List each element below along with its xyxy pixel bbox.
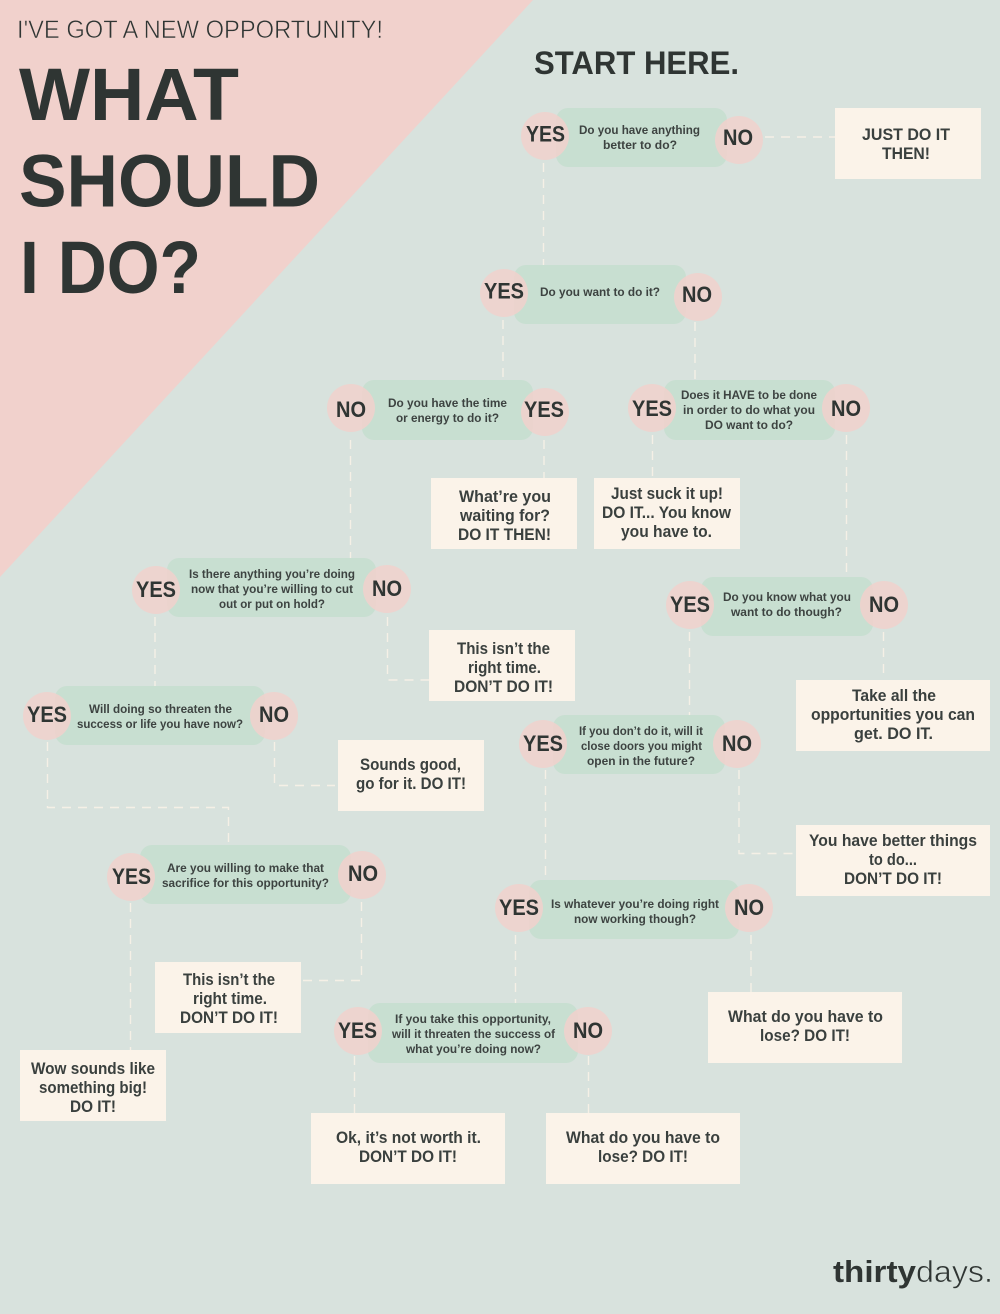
decision: close doors: If you don’t do it, will it [579, 724, 703, 738]
outcome: take all the opportunities [796, 680, 990, 751]
decision: anything better to do: NO [723, 125, 753, 150]
outcome: just suck it up: Just suck it up! [611, 485, 723, 503]
outcome: what do you have to lose first: What do you have to [728, 1008, 883, 1026]
logo: thirtydays [833, 1254, 993, 1289]
outcome: better things to do [796, 825, 990, 896]
decision: close doors: open in the future? [587, 754, 695, 768]
decision: know what you want: want to do though? [730, 605, 842, 619]
decision: want to do it: Do you want to do it? [540, 285, 660, 299]
decision: does it have to be done: Does it HAVE to be done [681, 388, 817, 402]
decision: threaten what you're doing: If you take this opportunity, [395, 1012, 551, 1026]
decision: threaten what you're doing [334, 1003, 612, 1063]
decision: willing to make sacrifice [107, 845, 386, 904]
outcome: what do you have to lose second: lose? DO IT! [598, 1148, 688, 1166]
decision: threaten success: YES [27, 702, 67, 727]
decision: anything to cut [132, 558, 411, 617]
outcome: take all the opportunities: opportunities you can [811, 706, 975, 724]
outcome: what're you waiting for: What’re you [459, 488, 551, 506]
decision: anything to cut: Is there anything you’re doing [189, 567, 355, 581]
outcome: sounds good [338, 740, 484, 811]
decision: threaten success: Will doing so threaten the [89, 702, 232, 716]
outcome: sounds good: Sounds good, [360, 756, 461, 774]
decision: know what you want [666, 577, 908, 636]
outcome: just do it then [835, 108, 981, 179]
outcome: take all the opportunities: get. DO IT. [854, 725, 933, 743]
dashed connectors [48, 137, 884, 1113]
decision: is it working: NO [734, 895, 764, 920]
decision: threaten what you're doing: NO [573, 1018, 603, 1043]
decision: willing to make sacrifice: sacrifice for this opportunity? [162, 876, 329, 890]
decision: threaten what you're doing: will it threaten the success of [391, 1027, 556, 1041]
outcome: not the right time second: right time. [193, 990, 267, 1008]
decision: want to do it: NO [682, 282, 712, 307]
logo: thirtydays: days. [916, 1254, 993, 1289]
decision: does it have to be done: in order to do what you [683, 403, 815, 417]
decision: does it have to be done: DO want to do? [705, 418, 793, 432]
outcome: just suck it up: DO IT... You know [602, 504, 731, 522]
decision: anything to cut: now that you’re willing to cut [191, 582, 353, 596]
decision: does it have to be done [628, 380, 870, 440]
outcome: not the right time second: This isn’t the [183, 971, 275, 989]
decision: threaten success: success or life you have now? [77, 717, 243, 731]
decision: is it working [495, 880, 773, 939]
outcome: what're you waiting for [431, 478, 577, 549]
decision: threaten success: NO [259, 702, 289, 727]
logo: thirtydays: thirty [833, 1254, 917, 1289]
outcome: what do you have to lose second [546, 1113, 740, 1184]
outcome: just suck it up: you have to. [621, 523, 712, 541]
decision: time or energy: or energy to do it? [396, 411, 499, 425]
outcome: not the right time: DON’T DO IT! [454, 678, 553, 696]
decision: time or energy: YES [524, 397, 564, 422]
decision: anything better to do: Do you have anything [579, 123, 700, 137]
outcome: take all the opportunities: Take all the [852, 687, 936, 705]
outcome: better things to do: DON’T DO IT! [844, 870, 942, 888]
decision: willing to make sacrifice: Are you willing to make that [167, 861, 324, 875]
decision: threaten what you're doing: what you’re doing now? [405, 1042, 541, 1056]
outcome: not the right time second [155, 962, 301, 1033]
outcome: not worth it: Ok, it’s not worth it. [336, 1129, 481, 1147]
decision: know what you want: Do you know what you [723, 590, 851, 604]
outcome: what're you waiting for: DO IT THEN! [458, 526, 551, 544]
outcome: not worth it [311, 1113, 505, 1184]
decision: anything better to do [521, 108, 763, 167]
title [19, 53, 320, 309]
decision: does it have to be done: NO [831, 396, 861, 421]
outcome: just do it then: JUST DO IT [862, 126, 950, 144]
start here heading: START HERE. [534, 45, 739, 81]
decision: threaten what you're doing: YES [338, 1018, 377, 1043]
title: I DO? [20, 226, 201, 309]
outcome: what do you have to lose first: lose? DO IT! [760, 1027, 850, 1045]
decision: time or energy: Do you have the time [388, 396, 507, 410]
decision: threaten success [23, 686, 298, 745]
decision: close doors [519, 715, 761, 774]
decision: close doors: YES [523, 731, 563, 756]
decision: willing to make sacrifice: NO [348, 861, 378, 886]
outcome: not the right time [429, 630, 575, 701]
decision: is it working: now working though? [574, 912, 696, 926]
decision: close doors: close doors you might [581, 739, 702, 753]
decision: know what you want: NO [869, 592, 899, 617]
outcome: not the right time second: DON’T DO IT! [180, 1009, 278, 1027]
decision: anything better to do: YES [526, 122, 565, 146]
eyebrow heading: I'VE GOT A NEW OPPORTUNITY! [17, 16, 383, 44]
outcome: just suck it up [594, 478, 740, 549]
outcome: better things to do: You have better things [809, 832, 977, 850]
title: SHOULD [19, 140, 320, 222]
decision: does it have to be done: YES [632, 396, 672, 421]
decision: willing to make sacrifice: YES [112, 864, 151, 889]
decision: time or energy [327, 380, 569, 440]
decision: is it working: Is whatever you’re doing right [551, 897, 719, 911]
decision: anything better to do: better to do? [603, 138, 677, 152]
outcome: just do it then: THEN! [882, 145, 930, 163]
decision: is it working: YES [499, 895, 539, 920]
outcome: wow sounds big [20, 1050, 166, 1121]
decision: anything to cut: out or put on hold? [219, 597, 325, 611]
outcome: wow sounds big: Wow sounds like [31, 1060, 155, 1078]
outcome: what do you have to lose second: What do you have to [566, 1129, 720, 1147]
pink corner triangle [0, 0, 533, 577]
outcome: wow sounds big: DO IT! [70, 1098, 116, 1116]
outcome: what do you have to lose first [708, 992, 902, 1063]
decision: close doors: NO [722, 731, 752, 756]
outcome: what're you waiting for: waiting for? [459, 507, 550, 525]
decision: want to do it [480, 265, 722, 324]
title: WHAT [19, 53, 239, 136]
decision: anything to cut: NO [372, 576, 402, 601]
decision: want to do it: YES [484, 278, 524, 304]
outcome: not the right time: right time. [468, 659, 541, 677]
decision: anything to cut: YES [136, 577, 176, 602]
outcome: better things to do: to do... [869, 851, 917, 869]
outcome: wow sounds big: something big! [39, 1079, 147, 1097]
outcome: not the right time: This isn’t the [457, 640, 550, 658]
decision: time or energy: NO [336, 397, 366, 422]
outcome: sounds good: go for it. DO IT! [356, 775, 466, 793]
outcome: not worth it: DON’T DO IT! [359, 1148, 457, 1166]
decision: know what you want: YES [670, 592, 710, 617]
